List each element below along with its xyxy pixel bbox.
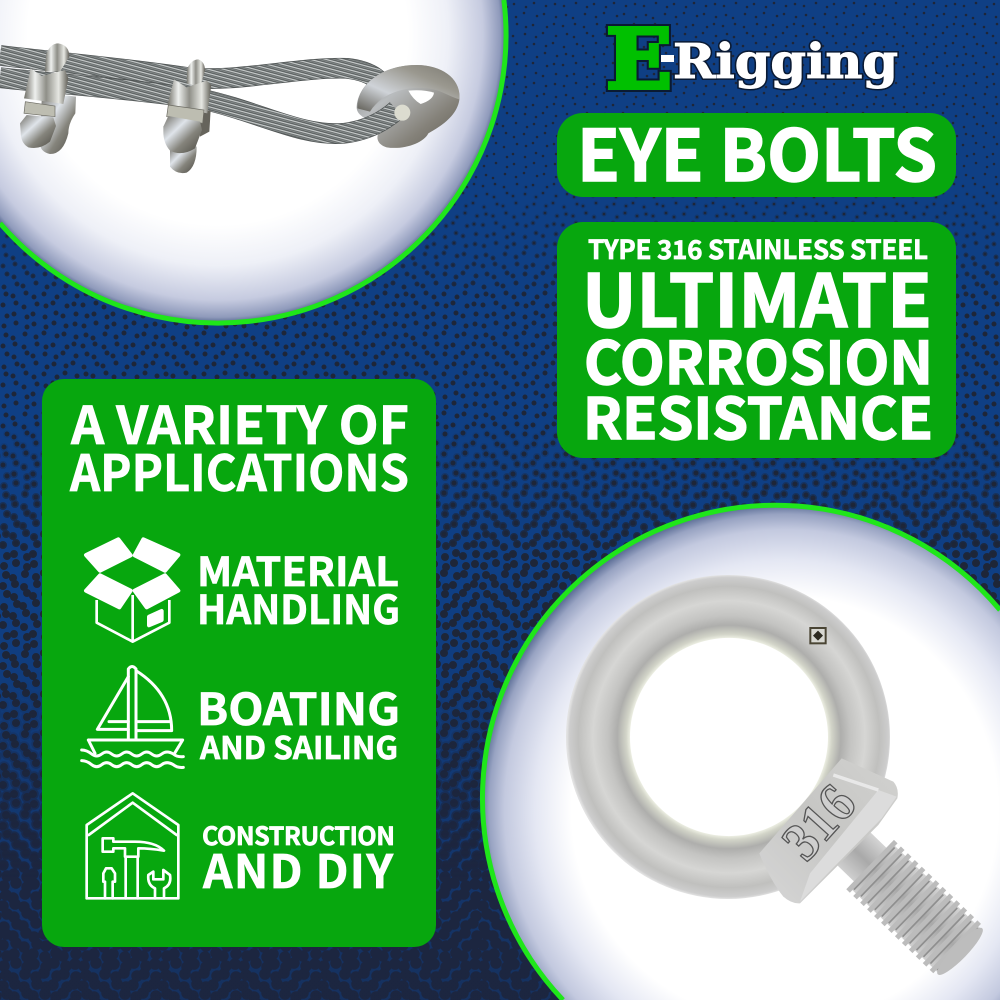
photo circle: wire rope with clips and eye bolt (0, 0, 506, 323)
heading: a variety of applications (69, 384, 409, 506)
panel: corrosion resistance (557, 222, 956, 458)
heading: a variety of applications: APPLICATIONS (69, 434, 409, 506)
stamped 316: 316 (770, 772, 867, 872)
label: material handling: MATERIAL (197, 540, 399, 598)
label: boating and sailing: AND SAILING (199, 723, 398, 768)
maker mark (809, 627, 827, 644)
logo: E-Rigging: Rigging (673, 34, 898, 90)
logo: E-Rigging: Rigging (673, 34, 898, 90)
ring (566, 575, 890, 899)
collar (759, 758, 898, 903)
heading: Eye Bolts: EYE BOLTS (577, 100, 937, 202)
heading: a variety of applications: A VARIETY OF (70, 384, 409, 459)
label: boating and sailing: BOATING (197, 674, 400, 738)
icon: sailboat (82, 666, 183, 767)
text: type 316: TYPE 316 STAINLESS STEEL (588, 230, 928, 267)
label: construction and diy: CONSTRUCTION (202, 817, 395, 853)
eye bolt (566, 575, 988, 979)
logo: E-Rigging: E (606, 12, 672, 108)
text: corrosion: CORROSION (584, 316, 933, 401)
label: construction and diy: AND DIY (202, 836, 393, 902)
threaded shank (831, 825, 988, 979)
icon: house with tools (87, 793, 178, 898)
label: boating and sailing (197, 674, 400, 768)
eye bolt ring (357, 65, 460, 121)
wire rope and hardware (0, 43, 460, 173)
eye bolt flange (357, 65, 460, 148)
icon: open box (86, 539, 178, 642)
label: material handling (197, 540, 400, 636)
photo circle: stainless steel eye bolt (482, 505, 1000, 1000)
label: material handling: HANDLING (197, 578, 400, 636)
logo: E-Rigging (606, 12, 898, 108)
panel: applications (42, 379, 436, 947)
logo: E-Rigging: E (606, 12, 672, 108)
text: ultimate: ULTIMATE (582, 243, 932, 349)
wire rope strands (0, 55, 397, 134)
rope clip 1 (20, 43, 76, 154)
text: resistance: RESISTANCE (583, 374, 933, 456)
rope clip 2 (163, 59, 211, 173)
